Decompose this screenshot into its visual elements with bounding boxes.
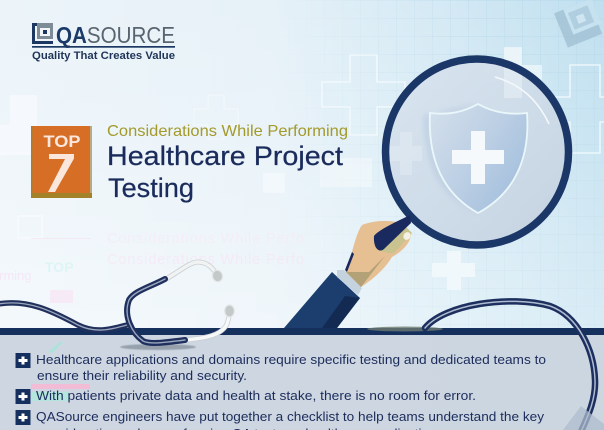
sleeve — [284, 272, 360, 328]
badge: top 7 — [31, 126, 92, 198]
icon: hand holding magnifier — [284, 215, 412, 328]
shadow — [120, 344, 196, 350]
right tube — [425, 301, 595, 430]
icon: corner logo watermark — [554, 0, 604, 48]
faint ghost text: TOP — [45, 259, 74, 275]
bottom panel — [0, 328, 604, 430]
plus — [452, 131, 504, 184]
badge: top 7: TOP — [44, 132, 80, 151]
subtitle: Considerations While Performing — [107, 123, 348, 140]
bullet 1 — [16, 352, 546, 383]
faint ghost text — [0, 231, 304, 303]
faint ghost text: Considerations While Perfo — [107, 252, 304, 268]
ear tips — [211, 269, 224, 283]
icon: plus bullet — [16, 353, 30, 368]
ear tubes — [166, 262, 216, 279]
bullet 1: Healthcare applications and domains require specific testing and dedicated teams to — [36, 352, 546, 367]
cuff — [337, 270, 362, 295]
icon: magnifying glass — [386, 48, 568, 245]
bullet 3: QASource engineers have put together a checklist to help teams understand the key — [36, 409, 544, 424]
panel watermark — [563, 406, 604, 430]
icon: stethoscope — [0, 262, 604, 430]
handle — [374, 215, 411, 251]
logo — [32, 22, 175, 62]
background — [0, 0, 604, 330]
left tube — [0, 303, 127, 330]
logo wordmark: QASOURCE — [56, 22, 175, 48]
heading: Testing — [108, 173, 194, 203]
bullet 2: With patients private data and health at stake, there is no room for error. — [36, 388, 476, 403]
logo mark — [32, 23, 53, 44]
icon: plus bullet — [16, 410, 30, 425]
Y branch — [127, 279, 185, 343]
compression colour artefacts — [31, 342, 90, 401]
heading — [107, 123, 348, 203]
title: Healthcare Project — [107, 141, 344, 171]
bullet list — [16, 352, 546, 430]
hand — [346, 221, 411, 287]
tagline: Quality That Creates Value — [32, 50, 175, 62]
shield — [424, 104, 527, 213]
icon: plus bullet — [16, 389, 30, 404]
faint ghost text: Considerations While Perfo — [107, 231, 304, 247]
bullet 1: ensure their reliability and security. — [37, 368, 247, 383]
bullet 3 — [16, 409, 544, 430]
